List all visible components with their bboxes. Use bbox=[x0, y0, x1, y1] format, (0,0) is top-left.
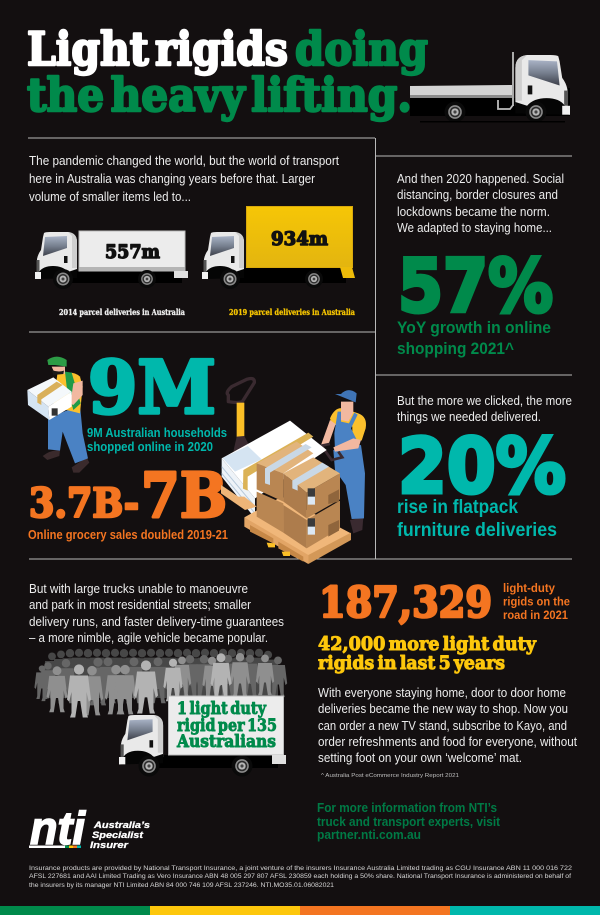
title: Light rigids bbox=[27, 22, 288, 76]
stat: 9M households: shopped online in 2020 bbox=[87, 440, 213, 454]
text: nimble vehicle: and park in most residential streets; smaller bbox=[29, 598, 251, 612]
stat: 42,000 more bbox=[318, 634, 537, 674]
dividers bbox=[28, 138, 572, 560]
stat: 42,000 more: rigids in last 5 years bbox=[318, 653, 505, 674]
panel: flatpack deliveries: things we needed delivered. bbox=[397, 410, 541, 424]
stat: 187,329: light-duty bbox=[503, 583, 556, 595]
intro text: here in Australia was changing years before that. Larger bbox=[29, 172, 315, 186]
text: door to door: can order a new TV stand, subscribe to Kayo, and bbox=[318, 719, 567, 733]
stat: grocery sales: Online grocery sales doubled 2019-21 bbox=[28, 528, 228, 542]
logo: nti: nti bbox=[30, 802, 86, 854]
panel: flatpack deliveries: 20% bbox=[398, 422, 566, 510]
stat: grocery sales: 7B bbox=[141, 459, 227, 532]
panel: 2020 growth: We adapted to staying home... bbox=[397, 221, 552, 235]
panel: flatpack deliveries: But the more we clicked, the more bbox=[397, 394, 572, 408]
call to action bbox=[317, 800, 501, 842]
stat: 187,329: rigids on the bbox=[503, 596, 570, 608]
truck: 2014 parcels bbox=[35, 231, 188, 289]
text: door to door: setting foot on your own ‘welcome’ mat. bbox=[318, 751, 522, 765]
text: door to door: order refreshments and food for everyone, without bbox=[318, 735, 577, 749]
icon: flatbed truck bbox=[410, 52, 570, 122]
truck captions: 2014 parcel deliveries in Australia bbox=[59, 307, 185, 317]
panel: 2020 growth: shopping 2021^ bbox=[397, 339, 514, 358]
logo: nti: Australia’s bbox=[93, 820, 150, 831]
truck: 2019 parcels: 934m bbox=[271, 229, 328, 250]
colour bar bbox=[0, 906, 600, 915]
truck: 1 per 135 Australians: Australians bbox=[176, 732, 276, 752]
stat: grocery sales: 3.7B- bbox=[29, 480, 139, 527]
panel: flatpack deliveries: furniture deliveries bbox=[397, 520, 557, 541]
illustration: crowd bbox=[34, 649, 287, 718]
truck captions bbox=[59, 307, 355, 317]
footnote: ^ Australia Post eCommerce Industry Report 2021 bbox=[321, 773, 459, 779]
intro text: volume of smaller items led to... bbox=[29, 190, 191, 204]
text: nimble vehicle: – a more nimble, agile vehicle became popular. bbox=[29, 631, 268, 645]
legal text: the insurers by its manager NTI Limited ABN 84 000 746 109 AFSL 237246. NTI.MO35.01.06082021 bbox=[29, 882, 335, 889]
panel: 2020 growth: lockdowns became the norm. bbox=[397, 205, 550, 219]
truck: 2014 parcels: 557m bbox=[105, 242, 160, 263]
legal text: AFSL 227681 and AAI Limited Trading as Vero Insurance ABN 48 005 297 807 AFSL 230859 each holding a 50% share. National Transport Insurance is administered on behalf of bbox=[29, 873, 571, 880]
truck: 1 per 135 Australians: rigid per 135 bbox=[177, 716, 277, 736]
text: nimble vehicle: But with large trucks unable to manoeuvre bbox=[29, 582, 248, 596]
truck captions: 2019 parcel deliveries in Australia bbox=[229, 307, 355, 317]
stat: grocery sales bbox=[28, 459, 228, 542]
stat: 9M households: 9M Australian households bbox=[87, 426, 227, 440]
intro text: The pandemic changed the world, but the world of transport bbox=[29, 154, 339, 168]
stat: 187,329: 187,329 bbox=[319, 578, 492, 627]
text: door to door: deliveries became the new way to shop. Now you bbox=[318, 702, 568, 716]
title bbox=[27, 22, 428, 122]
stat: 42,000 more: 42,000 more light duty bbox=[318, 634, 537, 655]
intro text bbox=[29, 154, 339, 204]
logo: nti: Insurer bbox=[90, 840, 130, 851]
truck: 1 per 135 Australians: 1 light duty bbox=[177, 699, 267, 719]
truck: 2019 parcels bbox=[202, 206, 355, 289]
legal text: Insurance products are provided by National Transport Insurance, a joint venture of the insurers Insurance Australia Limited trading as CGU Insurance ABN 11 000 016 722 bbox=[29, 865, 573, 872]
call to action: truck and transport experts, visit bbox=[317, 814, 501, 829]
text: nimble vehicle: delivery runs, and faster delivery-time guarantees bbox=[29, 615, 284, 629]
call to action: partner.nti.com.au bbox=[317, 827, 421, 842]
title: the heavy lifting. bbox=[27, 68, 412, 122]
panel: 2020 growth: And then 2020 happened. Social bbox=[397, 172, 564, 186]
logo: nti: Specialist bbox=[92, 830, 144, 841]
panel: flatpack deliveries bbox=[397, 394, 572, 541]
panel: 2020 growth: 57% bbox=[398, 244, 553, 330]
panel: 2020 growth: distancing, border closures and bbox=[397, 188, 558, 202]
text: door to door bbox=[318, 686, 577, 765]
text: nimble vehicle bbox=[29, 582, 284, 645]
text: door to door: With everyone staying home, door to door home bbox=[318, 686, 566, 700]
panel: 2020 growth bbox=[397, 172, 564, 358]
stat: 9M households: 9M bbox=[88, 345, 216, 431]
panel: 2020 growth: YoY growth in online bbox=[397, 318, 551, 337]
call to action: For more information from NTI’s bbox=[317, 800, 497, 815]
logo: nti bbox=[29, 802, 150, 854]
truck: 1 per 135 Australians bbox=[119, 696, 286, 776]
title: doing bbox=[295, 22, 428, 76]
legal text bbox=[29, 865, 573, 889]
stat: 187,329: road in 2021 bbox=[503, 610, 569, 622]
panel: flatpack deliveries: rise in flatpack bbox=[397, 497, 518, 518]
illustration: worker with pallet jack bbox=[221, 379, 366, 564]
illustration: worker carrying box bbox=[27, 357, 89, 473]
